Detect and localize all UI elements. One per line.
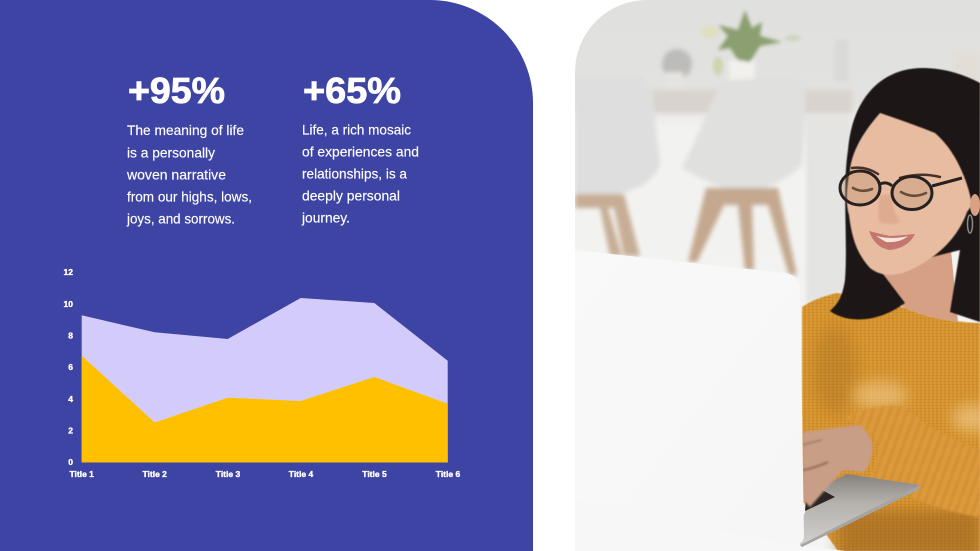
sweater shading	[813, 325, 980, 551]
table	[826, 548, 845, 551]
panel: blue background	[0, 0, 533, 551]
y axis labels	[64, 267, 73, 467]
background: kitchen counter and cabinets	[652, 40, 980, 305]
background: right chair	[682, 78, 806, 275]
x axis labels: Title 3	[216, 469, 240, 479]
sweater	[802, 293, 980, 551]
area series: yellow	[82, 356, 448, 462]
background: left chair	[575, 110, 660, 257]
x axis labels: Title 1	[69, 469, 94, 479]
y axis labels: 4	[68, 394, 73, 404]
mouth	[869, 231, 915, 250]
text block: right description: relationships, is a	[302, 166, 407, 182]
sleeve	[843, 406, 980, 517]
x axis labels	[69, 469, 460, 479]
neck	[882, 252, 958, 322]
photo: woman working on laptop	[575, 0, 980, 551]
hand	[803, 425, 872, 507]
hair: back	[830, 68, 980, 322]
text block: right description: journey.	[301, 210, 350, 226]
area series: lavender	[82, 298, 448, 462]
stat: +95%: +95%	[128, 70, 225, 111]
text block: left description	[126, 122, 252, 226]
text block: left description: is a personally	[127, 144, 215, 160]
y axis labels: 10	[64, 299, 73, 309]
y axis labels: 0	[68, 457, 73, 467]
stat: +65%: +65%	[303, 70, 401, 111]
y axis labels: 12	[64, 267, 73, 277]
background: kettle	[660, 48, 694, 78]
nose shading	[878, 195, 900, 224]
y axis labels: 6	[68, 362, 73, 372]
text block: left description: from our highs, lows,	[127, 188, 252, 204]
area chart	[64, 267, 460, 479]
laptop base	[800, 474, 920, 547]
laptop lid	[575, 250, 804, 543]
text block: left description: woven narrative	[126, 166, 226, 182]
text block: left description: joys, and sorrows.	[126, 210, 235, 226]
y axis labels: 8	[68, 330, 73, 340]
text block: left description: The meaning of life	[127, 122, 244, 138]
eyes	[853, 188, 926, 196]
background: plant in vase	[700, 10, 801, 82]
face	[847, 113, 972, 275]
text block: right description: of experiences and	[302, 144, 419, 160]
x axis labels: Title 2	[142, 469, 167, 479]
text block: right description	[301, 122, 419, 226]
x axis labels: Title 6	[436, 469, 460, 479]
eyebrows	[852, 168, 940, 178]
x axis labels: Title 4	[289, 469, 313, 479]
ear and earring	[968, 194, 980, 233]
text block: right description: Life, a rich mosaic	[302, 122, 411, 138]
y axis labels: 2	[68, 426, 73, 436]
x axis labels: Title 5	[362, 469, 387, 479]
text block: right description: deeply personal	[302, 188, 400, 204]
glasses	[840, 171, 962, 210]
